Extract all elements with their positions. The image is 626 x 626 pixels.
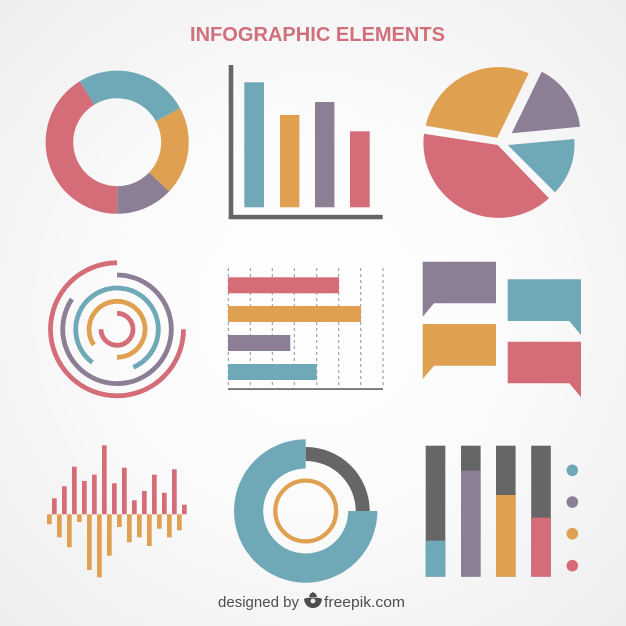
footer credit: freepik.com	[324, 595, 405, 611]
footer credit	[218, 592, 405, 611]
mirrored wave bar chart	[47, 445, 187, 577]
horizontal bar chart	[228, 268, 383, 390]
speech bubbles	[423, 262, 581, 397]
footer credit: designed by	[218, 595, 300, 611]
legend dots	[566, 464, 578, 572]
stacked columns	[426, 446, 551, 577]
radial progress chart	[234, 439, 377, 583]
concentric spiral chart	[50, 263, 183, 396]
column chart	[229, 65, 383, 219]
donut chart	[46, 71, 189, 214]
pie chart	[423, 67, 580, 218]
title: INFOGRAPHIC ELEMENTS	[190, 24, 445, 46]
